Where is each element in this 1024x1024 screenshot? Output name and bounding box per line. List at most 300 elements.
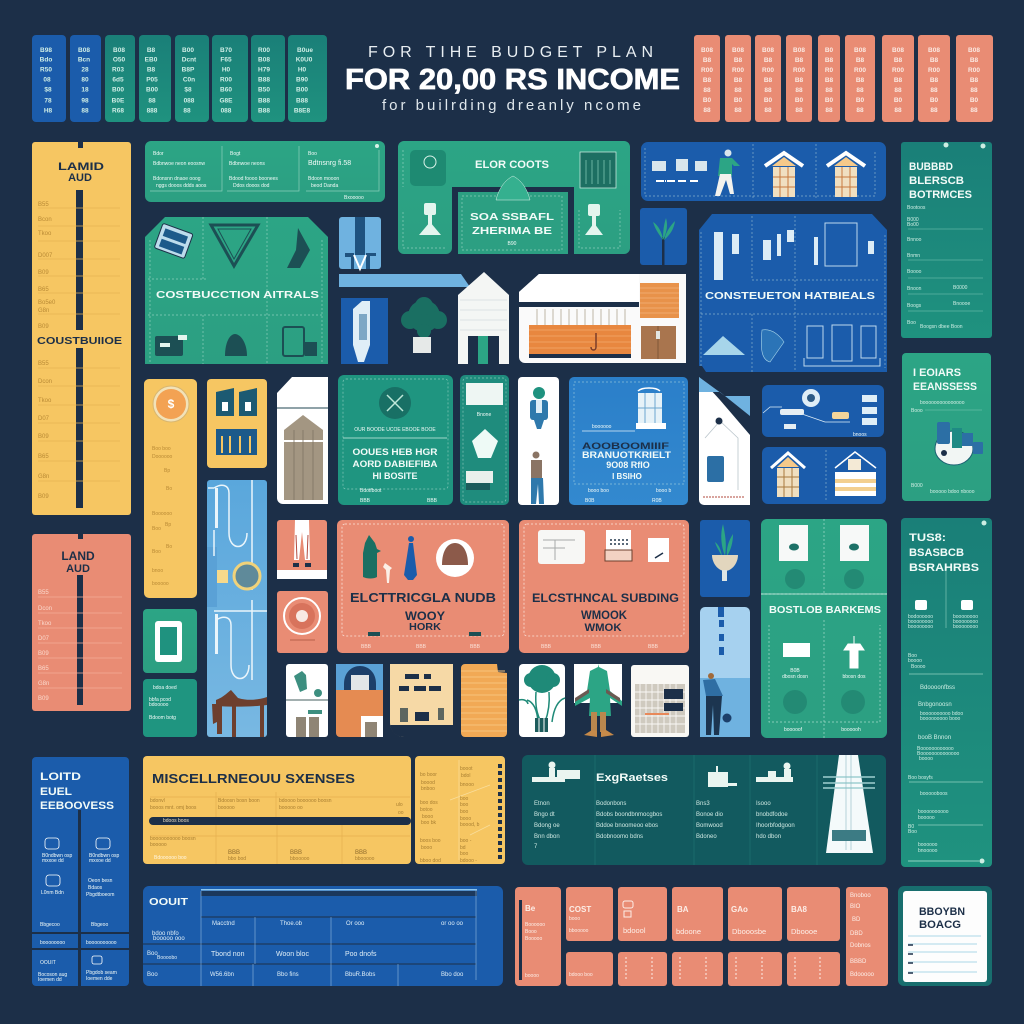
top right cards: B8 (856, 77, 865, 84)
top right cards: B8 (894, 77, 903, 84)
panel: teal side bottom: boooooo (918, 842, 938, 848)
panel: dark teal expenses: bnobdfodoe (756, 812, 788, 818)
card: seventh salmon: DBD (850, 931, 863, 937)
panel: dark teal expenses (522, 755, 886, 865)
heading: ExgRaetses (596, 772, 668, 784)
top right cards: 88 (734, 107, 742, 114)
panel: land and construction yellow: Tkoo (38, 398, 52, 404)
top left cards: 88 (148, 98, 156, 104)
panel: green notes top: Boo (308, 151, 317, 157)
top left cards (32, 35, 327, 122)
panel: teal side top: BLERSCB (909, 175, 964, 187)
icon: teal bottle (363, 535, 381, 578)
heading: OOUIT (149, 897, 188, 908)
top right cards: R00 (854, 67, 866, 74)
panel: teal side bottom: boooooooo (953, 614, 978, 620)
card: first salmon: Boooooo (525, 922, 545, 928)
panel: teal card below phone: bdoa doed (153, 685, 177, 691)
top left cards: B0ue (297, 47, 313, 54)
heading: BBOYBN (919, 906, 965, 918)
top left cards: B8P (182, 66, 195, 74)
top left cards: 78 (44, 98, 52, 104)
top left cards: 88 (183, 108, 191, 114)
heading: BUBBBD (909, 161, 953, 173)
top left cards: B88 (258, 76, 270, 84)
icon: monitor (410, 150, 446, 186)
card: sixth salmon: BA8 (791, 905, 808, 914)
heading: AOOBOOMIIIF (582, 441, 669, 452)
panel: teal side top: Bootoos (907, 205, 926, 211)
top left cards: Bdo (40, 56, 52, 64)
icon: triangle (211, 225, 258, 266)
icon panel: blue plant (640, 208, 687, 265)
panel: blue equipment: bnoos (853, 432, 867, 438)
card: first salmon: Be (525, 904, 536, 913)
top right cards: 88 (764, 107, 772, 114)
panel: blue equipment (762, 385, 884, 438)
panel: yellow tall coin: Doooooo (152, 454, 173, 460)
icon tile: plant roots (519, 664, 565, 737)
panel: teal side bottom: boooooooo (953, 619, 978, 625)
panel: green boiler expenses: boooooh (841, 727, 861, 733)
panel: green notes top: Bdonsnn dnaoe ooog (153, 176, 201, 182)
panel: teal side bottom: Bnbgonoosn (918, 702, 952, 708)
icon panel: white pitched house (699, 377, 750, 505)
top right cards: R00 (701, 67, 713, 74)
icon tile: control panel (631, 665, 689, 737)
top right cards: 88 (894, 107, 902, 114)
top left cards: B98 (40, 47, 52, 54)
icon: mountain (703, 336, 745, 355)
card: cost salmon: COST (569, 905, 591, 914)
card: fifth salmon (728, 887, 782, 986)
panel: teal side bottom: boooo (919, 756, 933, 762)
panel: blue land fuel expenses: mxxoe dd (42, 858, 64, 864)
panel: blue land fuel expenses: boooooooo (40, 940, 65, 946)
top left cards: C0n (183, 76, 195, 84)
top left cards: EB0 (145, 56, 158, 64)
panel: blue land fuel expenses: B0ndbwn osp (89, 853, 120, 859)
panel: blue cost table: bdoo nbfo (152, 931, 179, 937)
panel: elor coots green (398, 141, 630, 254)
panel: blue cost table: Bbo fins (277, 972, 299, 978)
icon: lamp right (585, 204, 603, 235)
panel: teal side top: Bnnoo (907, 237, 922, 243)
panel: blue cost table: Bbo doo (441, 972, 464, 978)
panel: teal side bottom: Bdoooonfbss (920, 685, 955, 691)
top right cards: B8 (703, 57, 712, 64)
top right cards (694, 35, 993, 122)
top left cards: R00 (258, 47, 270, 54)
panel: yellow tall coin (144, 379, 197, 598)
top right cards: R00 (928, 67, 940, 74)
panel: yellow side list: bboo dod (420, 858, 441, 864)
subtitle: for builrding dreanly ncome (382, 97, 641, 114)
panel: blue two houses (762, 447, 886, 504)
panel: teal card below phone: bdooooo (149, 702, 169, 708)
panel: land and construction yellow: G8n (38, 474, 49, 480)
card: first salmon: Booooo (525, 936, 542, 942)
top right cards: B8 (930, 57, 939, 64)
top left cards: B08 (258, 56, 270, 64)
panel: electrical wood work salmon: WOOY (405, 609, 445, 623)
panel: green leisure side: B000 (911, 483, 923, 489)
panel: blue land fuel expenses: Pbgdtboeom (86, 892, 114, 898)
panel: dark teal expenses: Bdoneo (696, 834, 717, 840)
panel: salmon land and: Tkoo (38, 621, 52, 627)
panel: blue building card: R0B (652, 498, 662, 504)
icon panel: blue potted plant (700, 520, 750, 597)
top right cards: B8 (825, 77, 834, 84)
icon panel: white figures (518, 377, 559, 505)
panel: teal side bottom: Boo (908, 653, 917, 659)
card: sixth salmon: Dboooe (791, 927, 817, 936)
top right cards: B8 (734, 77, 743, 84)
card: first salmon: Booo (525, 929, 537, 935)
top left cards: B70 (220, 47, 232, 54)
panel: miscellaneous expenses yellow: booooo oo (279, 805, 303, 811)
panel: electrical wood work salmon: BBB (416, 644, 427, 650)
panel: blue building card: booo boo (588, 488, 609, 494)
panel: blue land fuel expenses: Bocoson aug (38, 972, 67, 978)
panel: blue cost table: booooo ooo (153, 936, 185, 942)
panel: blue land fuel expenses: OOUIT (40, 960, 56, 966)
top right cards: R0 (825, 67, 834, 74)
panel: blue land fuel expenses: mxxoe dd (89, 858, 111, 864)
heading: BOSTLOB BARKEMS (769, 605, 881, 616)
panel: salmon land and: B09 (38, 651, 49, 657)
heading: CONSTEUETON HATBIEALS (705, 290, 875, 302)
panel: dark teal expenses: Bonoe dio (696, 812, 724, 818)
icon: large shop building (519, 274, 686, 363)
panel: teal side bottom: B0 (908, 824, 914, 830)
panel: teal side bottom: booooooooo booo (920, 716, 961, 722)
top right cards: B8 (764, 57, 773, 64)
panel: yellow side list: boo - (460, 838, 472, 844)
panel: blue land fuel expenses: Pbgdob seam (86, 970, 117, 976)
panel: miscellaneous expenses yellow (143, 756, 411, 864)
top right cards: B08 (854, 47, 866, 54)
top left cards: 888 (147, 108, 158, 114)
top left cards: H79 (258, 66, 270, 74)
panel: teal side bottom: booooo (918, 815, 935, 821)
icon: chair (212, 690, 267, 737)
panel: dark teal expenses: Bnn dbon (534, 834, 560, 840)
panel: blue building card: B0B (585, 498, 595, 504)
panel: green boiler expenses: dbosn dosn (782, 674, 808, 680)
panel: blue land fuel expenses: EUEL (40, 786, 72, 798)
panel: green boiler expenses: booooof (784, 727, 803, 733)
top left cards: B60 (220, 86, 232, 94)
panel: budget board (898, 886, 992, 986)
card: seventh salmon: BIO (850, 904, 861, 910)
top right cards: B0 (894, 97, 903, 104)
panel: land and construction yellow: AUD (68, 172, 92, 184)
icon: tools bottom row (155, 327, 317, 356)
panel: yellow tall coin: Boo boo (152, 446, 171, 452)
icon: house one (765, 153, 803, 197)
icon: shield arc (496, 176, 530, 200)
panel: yellow side list: booo (460, 816, 471, 822)
panel: yellow tall coin: booooo (152, 581, 169, 587)
card: seventh salmon (846, 887, 888, 986)
top left cards: B08 (113, 47, 125, 54)
panel: dark teal expenses: Bns3 (696, 801, 710, 807)
top right cards: 88 (825, 107, 833, 114)
panel: blue land fuel expenses (32, 757, 129, 986)
panel: blue land fuel expenses: EEBOOVESS (40, 800, 114, 812)
panel: yellow side list: boood (421, 780, 435, 786)
panel: dark teal expenses: Bomwood (696, 823, 723, 829)
panel: green boiler expenses: B0B (790, 668, 800, 674)
panel: blue cost table: Boooobo (157, 955, 177, 961)
panel: yellow tall coin: bnoo (152, 568, 163, 574)
panel: dark teal expenses: Bngo dt (534, 812, 555, 818)
icon: brick dome (436, 539, 474, 577)
panel: teal tools card: BBB (360, 498, 371, 504)
panel: teal side bottom: Boooooooooooooo (917, 751, 959, 757)
top left cards: R50 (40, 66, 52, 74)
top right cards: 88 (856, 107, 864, 114)
panel: yellow tall coin: Bp (164, 468, 170, 474)
top right cards: B8 (764, 77, 773, 84)
icon: gauge (234, 563, 260, 589)
icon tile: green coat figure (574, 664, 622, 737)
panel: green notes top: Bdtnsnrg fi.58 (308, 160, 351, 167)
panel: salmon land and: D07 (38, 636, 50, 642)
panel: teal card below phone: bbfa pcod (149, 697, 171, 703)
top right cards: B8 (970, 77, 979, 84)
top left cards: B88 (258, 98, 270, 104)
top right cards: B08 (793, 47, 805, 54)
top right cards: B8 (795, 57, 804, 64)
top right cards: B08 (762, 47, 774, 54)
icon: hammer (383, 563, 392, 583)
top left cards: G8E (219, 98, 233, 104)
panel: elor coots green: SOA SSBAFL (470, 212, 554, 223)
card: first salmon (515, 887, 561, 986)
panel: yellow tall coin: Boooooo (152, 511, 172, 517)
icon: sink middle (708, 766, 737, 787)
panel: green notes top: nggs dooos ddds aoos (156, 183, 207, 189)
panel: blue building card: BRANUOTKRIELT (582, 450, 671, 461)
panel: dark teal expenses: Ihoorbfodgoon (756, 823, 795, 829)
panel: electrical building work salmon: WMOOK (581, 608, 627, 622)
icon: house three (771, 453, 805, 497)
top left cards: $8 (44, 86, 52, 94)
panel: blue land fuel expenses: Ioemen dd (38, 977, 62, 983)
icon: tool badge (379, 387, 411, 419)
panel: miscellaneous expenses yellow: boooooooooo boosn (150, 836, 196, 842)
panel: blue cost table: Poo dnofs (345, 951, 377, 958)
panel: land and construction yellow: Tkoo (38, 231, 52, 237)
top right cards: 88 (856, 87, 864, 94)
panel: green phone card (143, 609, 197, 673)
panel: teal side top: Boo (907, 320, 916, 326)
top right cards: B8 (795, 77, 804, 84)
top left cards: B8E8 (294, 108, 311, 114)
panel: budget board: BOACG (919, 919, 961, 931)
panel: teal side bottom: boooooooo (908, 619, 933, 625)
card: seventh salmon: Bdooooo (850, 972, 875, 978)
panel: green notes top: Bxooooo (344, 195, 364, 201)
panel: teal side bottom: boooooooooo bdoo (920, 711, 963, 717)
panel: green leisure side: booooooooooooooo (920, 400, 965, 406)
heading: TUS8: (909, 532, 946, 544)
card: cost salmon: bdooo boo (569, 972, 593, 978)
panel: teal side top: Bnoooe (953, 301, 970, 307)
panel: teal side top: B000 (907, 217, 919, 223)
panel: teal tools card: OUR BOODE UCOE EBOOE BOOE (354, 427, 436, 433)
panel: blue cost table: W56.6bn (210, 972, 234, 978)
top right cards: B0 (764, 97, 773, 104)
panel: green notes top: Bogt (230, 151, 241, 157)
card: cost salmon (566, 887, 613, 986)
panel: teal side bottom: boooooboos (920, 791, 948, 797)
top right cards: 88 (930, 87, 938, 94)
panel: blue building card: booo b (656, 488, 672, 494)
icon: cards (154, 223, 193, 259)
panel: blue building card: boooooo (592, 424, 612, 430)
panel: dark teal expenses: Bdobs boondbnmocgbos (596, 812, 662, 818)
panel: teal side top: BOTRMCES (909, 189, 972, 201)
icon panel: white door shed (277, 377, 328, 504)
panel: teal side bottom: BSRAHRBS (909, 562, 979, 574)
card: fourth salmon: BA (677, 905, 689, 914)
panel: miscellaneous expenses yellow: oo (398, 810, 404, 816)
panel: teal tools card: Bdotfboot (360, 488, 382, 494)
panel: land and construction yellow: Bcon (38, 217, 52, 223)
panel: yellow side list: boo (460, 809, 469, 815)
panel: yellow side list: bnboo (421, 786, 435, 792)
panel: miscellaneous expenses yellow: bdonvl (150, 798, 165, 804)
panel: yellow side list: booo (421, 845, 432, 851)
construction label: COUSTBUIIOE (37, 335, 122, 347)
icon: white tower (826, 755, 873, 853)
top right cards: R00 (762, 67, 774, 74)
panel: electrical building work salmon (519, 520, 689, 653)
icon: stacked blocks (935, 422, 983, 465)
panel: yellow bank icons (207, 379, 267, 468)
panel: yellow side list: bo boor (420, 772, 437, 778)
icon: white box (648, 538, 669, 562)
top left cards: 98 (81, 98, 89, 104)
top right cards: B8 (703, 77, 712, 84)
panel: miscellaneous expenses yellow: ulo (396, 802, 403, 808)
panel: electrical building work salmon: BBB (648, 644, 659, 650)
panel: yellow tall coin: Boo (152, 526, 161, 532)
panel: green notes top: Bdoon mooon (308, 176, 339, 182)
panel: green notes top: Bdbnwoe neon eoosnw (153, 161, 205, 167)
panel: miscellaneous expenses yellow: bdoooo boooooo boosn (279, 798, 332, 804)
panel: land and construction yellow: B55 (38, 202, 49, 208)
panel: teal tools card (338, 375, 453, 505)
panel: land and construction yellow (32, 142, 131, 515)
panel: miscellaneous expenses yellow: booooo (218, 805, 235, 811)
top right cards: B08 (928, 47, 940, 54)
card: fifth salmon: GAo (731, 905, 748, 914)
panel: teal side bottom: boooooooooo (918, 809, 949, 815)
panel: miscellaneous expenses yellow: BBB (228, 850, 240, 856)
icon: house two (827, 153, 865, 197)
panel: miscellaneous expenses yellow: bbo bod (228, 856, 246, 862)
panel: land and construction yellow: Dcon (38, 379, 52, 385)
main title: FOR 20,00 RS INCOME (345, 64, 680, 96)
icon: desk left (532, 762, 580, 782)
icon panel: salmon trousers (277, 520, 327, 579)
panel: land and construction yellow: G8n (38, 308, 49, 314)
card: third salmon (618, 887, 667, 986)
panel: electrical building work salmon: BBB (591, 644, 602, 650)
top right cards: B08 (892, 47, 904, 54)
icon: board on stand (606, 530, 631, 550)
card: cost salmon: bbooooo (569, 928, 589, 934)
panel: teal side bottom: Boooo (911, 664, 926, 670)
card: seventh salmon: BD (852, 917, 861, 923)
panel: salmon land and: B09 (38, 696, 49, 702)
panel: teal tools card: AORD DABIEFIBA (352, 459, 438, 470)
panel: blue land fuel expenses: L0nm Bdn (41, 890, 64, 896)
panel: yellow side list: booo (422, 814, 433, 820)
panel: light blue pipes (207, 480, 267, 737)
panel: green notes top: Bdood foooo boonees (229, 176, 278, 182)
top left cards: B88 (296, 98, 308, 104)
top right cards: B0 (970, 97, 979, 104)
panel: miscellaneous expenses yellow: Bdoooooo boo (154, 855, 187, 861)
panel: miscellaneous expenses yellow: Bdoosn bosn boon (218, 798, 260, 804)
top right cards: B8 (856, 57, 865, 64)
panel: salmon land and: AUD (66, 563, 90, 575)
card: seventh salmon: BBBD (850, 959, 867, 965)
top left cards: 80 (81, 76, 89, 84)
panel: dark teal expenses: Isooo (756, 801, 771, 807)
panel: land and construction yellow: B09 (38, 324, 49, 330)
panel: teal tools card: BBB (427, 498, 438, 504)
panel: green leisure side: booooo bdoo nbooo (930, 489, 975, 495)
top left cards: R68 (112, 108, 124, 114)
panel: blue building card (569, 377, 688, 505)
top right cards: 88 (930, 107, 938, 114)
heading: COSTBUCCTION AITRALS (156, 289, 319, 301)
top left cards: B0E (112, 98, 125, 104)
panel: electrical wood work salmon: HORK (409, 621, 441, 633)
panel: dark teal expenses: Bdobnoomo bdns (596, 834, 643, 840)
top left cards: R03 (112, 66, 124, 74)
panel: dark teal expenses: Bdong oe (534, 823, 560, 829)
panel: teal side bottom: Boo (908, 829, 917, 835)
top left cards: B8 (147, 66, 156, 74)
panel: teal side bottom: boooo (908, 658, 922, 664)
panel: elor coots green: ZHERIMA BE (472, 226, 552, 237)
panel: teal tools card: HI BOSITE (372, 471, 418, 481)
panel: elor coots green: B90 (508, 241, 517, 247)
panel: teal side top: B0000 (953, 285, 968, 291)
panel: blue land fuel expenses: B0ndbwn osp (42, 853, 73, 859)
top right cards: B08 (701, 47, 713, 54)
panel: teal side bottom: BSASBCB (909, 547, 964, 559)
panel: yellow tall coin: Bp (165, 522, 171, 528)
panel: yellow side list: boos boo (420, 838, 441, 844)
card: third salmon: bdoool (623, 926, 646, 935)
icon panel: salmon swirl (277, 591, 328, 653)
icon: machine right (580, 152, 616, 188)
panel: green notes top: Bdor (153, 151, 164, 157)
panel: salmon land and (32, 534, 131, 711)
panel: green notes top: Bdbnwoe neons (229, 161, 265, 167)
top right cards: B8 (825, 57, 834, 64)
panel: yellow side list: booot (460, 766, 473, 772)
panel: teal side top: Boogsn dbee Boon (920, 324, 963, 330)
